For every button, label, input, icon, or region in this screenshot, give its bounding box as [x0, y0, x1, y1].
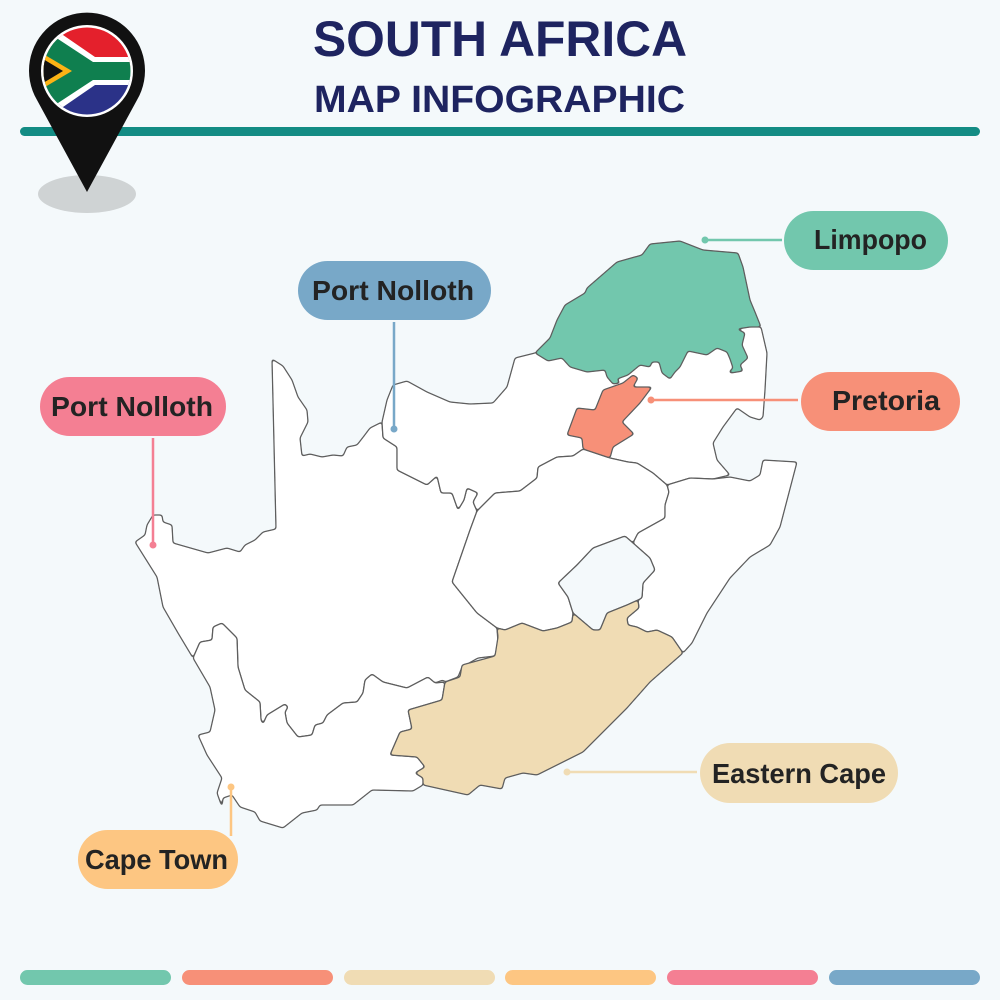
callout: Eastern Cape: [564, 743, 898, 803]
title: [313, 11, 687, 121]
region: Free State: [452, 449, 669, 631]
callout: Port Nolloth blue: [298, 261, 491, 432]
callout: Limpopo: Limpopo: [814, 224, 927, 255]
icon: map pin shadow: [38, 175, 136, 213]
region: Eastern Cape: [390, 600, 683, 795]
callout: Port Nolloth pink: [40, 377, 226, 548]
callout: Pretoria: Pretoria: [832, 385, 940, 416]
callout: Cape Town: Cape Town: [85, 844, 228, 875]
title: MAP INFOGRAPHIC: [314, 79, 685, 121]
callout: Cape Town: [78, 784, 238, 889]
region: Northern Cape: [135, 359, 498, 737]
region: Lesotho: [558, 536, 655, 630]
region: North West, Gauteng surroundings and Mpumalanga: [382, 320, 767, 511]
callout: Port Nolloth pink: Port Nolloth: [51, 391, 213, 422]
map of South Africa: [135, 241, 797, 828]
region: Western Cape: [193, 623, 445, 828]
header rule: [20, 127, 980, 136]
footer colour bars: [20, 970, 980, 985]
callout: Eastern Cape: Eastern Cape: [712, 758, 886, 789]
callout: Pretoria: [648, 372, 960, 431]
region: Limpopo: [535, 241, 761, 384]
icon: location pin with flag: [29, 13, 145, 192]
title: SOUTH AFRICA: [313, 11, 687, 67]
region: Gauteng: [567, 375, 652, 458]
callout: Port Nolloth blue: Port Nolloth: [312, 275, 474, 306]
callout: Limpopo: [702, 211, 948, 270]
region: KwaZulu-Natal: [627, 460, 797, 653]
